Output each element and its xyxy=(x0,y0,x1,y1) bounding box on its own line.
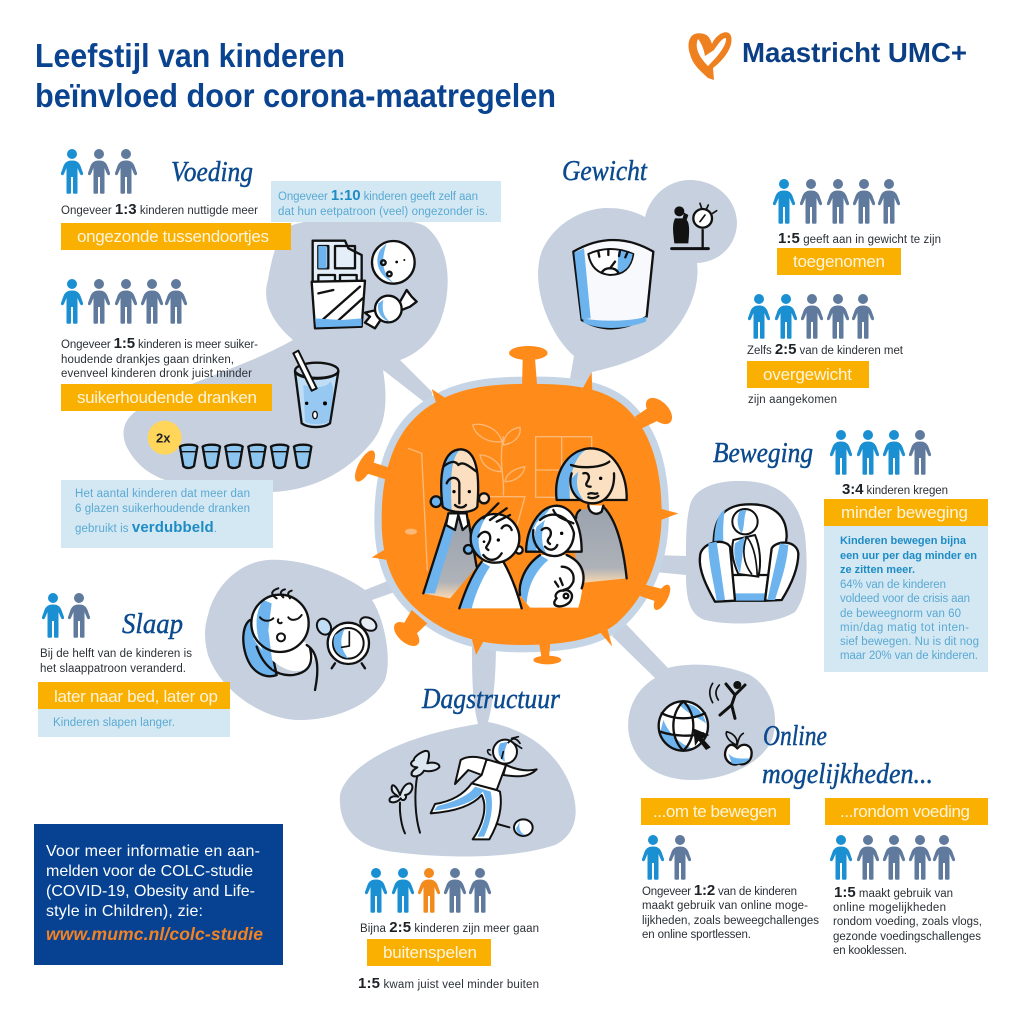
icon: sleeping child xyxy=(243,588,317,690)
illustration: sleeping child and clock xyxy=(243,588,379,690)
panel: later naar bed: later naar bed, later op xyxy=(54,687,218,706)
text: online voeding: online mogelijkheden xyxy=(833,902,946,914)
label bar: rondom voeding xyxy=(825,798,988,825)
text: suikerhoudende drankjes: evenveel kinderen dronk juist minder xyxy=(61,368,252,380)
pictogram: slaap 1 of 2 xyxy=(42,593,90,638)
pictogram: online 1 of 2 xyxy=(642,835,691,880)
pictogram: 1 of 5 children xyxy=(61,279,187,324)
icon: bathroom scale xyxy=(573,240,653,328)
virus body xyxy=(382,384,662,645)
icon: person on scale xyxy=(672,203,717,249)
pictogram: gewicht 2 of 5 xyxy=(748,294,874,339)
illustration: corona virus with family xyxy=(351,346,678,664)
text: 1:5 minder buiten: 1:5 kwam juist veel minder buiten xyxy=(358,975,539,992)
icon: flowers xyxy=(390,751,439,833)
panel: blob connectors and grey thought bubbles xyxy=(124,180,807,856)
text: 3:4: 3:4 kinderen kregen xyxy=(842,481,948,498)
heading: Gewicht: Gewicht xyxy=(562,155,648,187)
pictogram: 1 of 3 children xyxy=(61,149,137,194)
callout: verdubbeld: gebruikt is verdubbeld. xyxy=(75,519,217,536)
icon: globe with cursor xyxy=(659,701,711,751)
info box: meer informatie: style in Children), zie: xyxy=(46,903,203,920)
info box: meer informatie: Voor meer informatie en aan- xyxy=(46,843,260,860)
label bar: ongezonde tussendoortjes xyxy=(61,223,291,250)
title: beïnvloed door corona-maatregelen xyxy=(35,77,556,114)
label bar: rondom voeding: ...rondom voeding xyxy=(840,802,970,821)
icon: child xyxy=(431,737,537,839)
daughter xyxy=(520,506,584,608)
info box: meer informatie: (COVID-19, Obesity and Life- xyxy=(46,883,255,900)
heading: Slaap: Slaap xyxy=(122,608,183,640)
heading: Voeding: Voeding xyxy=(171,156,253,188)
panel: minder beweging: ze zitten meer. xyxy=(840,564,915,576)
blob: beweging xyxy=(655,481,807,624)
text: zijn aangekomen: zijn aangekomen xyxy=(748,394,837,406)
icon: ball xyxy=(514,819,533,836)
panel: minder beweging: Kinderen bewegen bijna xyxy=(840,535,967,547)
label bar: suikerhoudende dranken xyxy=(61,384,272,411)
logo: Maastricht UMC+: Maastricht UMC+ xyxy=(742,37,967,68)
text: online bewegen: Ongeveer 1:2 van de kinderen xyxy=(642,882,797,899)
label bar: suikerhoudende dranken: suikerhoudende dranken xyxy=(77,388,257,407)
text: online voeding: en kooklessen. xyxy=(833,945,907,957)
icon: chocolate bar xyxy=(312,241,365,328)
pictogram: online 1 of 5 xyxy=(830,835,955,880)
info box: meer informatie: www.mumc.nl/colc-studie xyxy=(46,924,263,944)
icon: candy xyxy=(365,290,417,328)
label bar: toegenomen: toegenomen xyxy=(793,252,885,271)
text: online bewegen: lijkheden, zoals beweegchallenges xyxy=(642,915,819,927)
label bar: toegenomen xyxy=(777,248,901,275)
blob: voeding xyxy=(124,217,448,493)
info box: meer informatie xyxy=(34,824,283,965)
panel: minder beweging: sief bewegen. Nu is dit nog xyxy=(840,636,979,648)
icon: 2x badge: 2x xyxy=(156,430,171,445)
heading: Beweging: Beweging xyxy=(713,437,813,469)
panel: minder beweging: een uur per dag minder en xyxy=(840,550,977,562)
text: online voeding xyxy=(833,884,982,957)
panel: later naar bed xyxy=(38,682,230,737)
panel: later naar bed: Kinderen slapen langer. xyxy=(53,717,175,729)
text: suikerhoudende drankjes: houdende drankjes gaan drinken, xyxy=(61,354,234,366)
callout: 1:10: Ongeveer 1:10 kinderen geeft zelf aan xyxy=(278,187,478,204)
illustration: online icons xyxy=(659,681,752,765)
label bar: om te bewegen xyxy=(641,798,790,825)
text: online voeding: gezonde voedingschallenges xyxy=(833,931,981,943)
label bar: om te bewegen: ...om te bewegen xyxy=(653,802,777,821)
blob: dagstructuur xyxy=(340,640,576,856)
text: online bewegen: maakt gebruik van online moge- xyxy=(642,900,808,912)
label bar: buitenspelen xyxy=(367,939,491,966)
text: bijna 2:5: Bijna 2:5 kinderen zijn meer gaan xyxy=(360,919,539,936)
mother xyxy=(556,448,627,583)
title: Leefstijl van kinderen xyxy=(35,37,345,74)
pictogram: dagstructuur 2 of 5 plus 1 orange xyxy=(365,868,491,913)
text: zelfs 2:5: Zelfs 2:5 van de kinderen met xyxy=(747,341,904,358)
illustration: child in armchair xyxy=(700,504,798,602)
info box: meer informatie: melden voor de COLC-studie xyxy=(46,863,253,880)
illustration: snacks xyxy=(148,241,417,468)
text: helft kinderen: het slaappatroon veranderd. xyxy=(40,663,186,675)
panel: minder beweging: de beweegnorm van 60 xyxy=(840,608,961,620)
panel: minder beweging: maar 20% van de kinderen. xyxy=(840,650,978,662)
pictogram: beweging 3 of 4 xyxy=(830,430,931,475)
illustration: weighing scales xyxy=(573,203,717,328)
father xyxy=(423,449,489,598)
icon: apple xyxy=(725,732,752,765)
icon: six glasses xyxy=(180,445,311,468)
text: 1:5 gewicht: 1:5 geeft aan in gewicht te zijn xyxy=(778,230,941,247)
heading: Online mogelijkheden xyxy=(762,720,933,790)
text: ongeveer 1:3: Ongeveer 1:3 kinderen nuttigde meer xyxy=(61,201,258,218)
icon: glass with straw xyxy=(293,351,338,427)
title xyxy=(35,37,556,114)
son xyxy=(459,503,523,608)
panel: minder beweging: 64% van de kinderen xyxy=(840,579,946,591)
text: helft kinderen: Bij de helft van de kinderen is xyxy=(40,648,192,660)
icon: 2x badge xyxy=(148,421,182,455)
text: online voeding: 1:5 maakt gebruik van xyxy=(834,884,953,901)
text: online bewegen: en online sportlessen. xyxy=(642,929,751,941)
panel: minder beweging xyxy=(824,499,988,672)
panel: minder beweging: minder beweging xyxy=(841,503,968,522)
background: door, plant, window xyxy=(405,424,592,570)
callout: 1:10: dat hun eetpatroon (veel) ongezonder is. xyxy=(278,206,488,218)
label bar: ongezonde tussendoortjes: ongezonde tussendoortjes xyxy=(77,227,269,246)
panel: minder beweging: voldeed voor de crisis aan xyxy=(840,593,970,605)
virus ring xyxy=(382,384,662,645)
text: online voeding: rondom voeding, zoals vlogs, xyxy=(833,916,982,928)
callout: verdubbeld xyxy=(61,480,273,548)
label bar: buitenspelen: buitenspelen xyxy=(383,943,477,962)
blob: online xyxy=(612,622,775,780)
text: helft kinderen xyxy=(40,648,192,675)
pictogram: gewicht 1 of 5 xyxy=(773,179,900,224)
blob: gewicht xyxy=(538,180,737,392)
blob: slaap xyxy=(205,560,406,720)
heading: Online mogelijkheden: mogelijkheden... xyxy=(762,758,933,790)
label bar: overgewicht: overgewicht xyxy=(763,365,852,384)
callout: 1:10 xyxy=(271,181,501,222)
callout: verdubbeld: Het aantal kinderen dat meer dan xyxy=(75,488,250,500)
text: suikerhoudende drankjes: Ongeveer 1:5 kinderen is meer suiker- xyxy=(61,335,258,352)
icon: jumping figure xyxy=(710,681,745,718)
text: suikerhoudende drankjes xyxy=(61,335,258,380)
text: online bewegen xyxy=(642,882,819,941)
panel: minder beweging: min/dag matig tot inten- xyxy=(840,622,969,634)
heading: Dagstructuur: Dagstructuur xyxy=(421,683,561,715)
label bar: overgewicht xyxy=(747,361,869,388)
logo: Maastricht UMC+ xyxy=(689,32,967,80)
icon: cookie xyxy=(372,241,415,284)
virus spikes xyxy=(351,346,678,664)
illustration: child playing football xyxy=(390,737,537,839)
heading: Online mogelijkheden: Online xyxy=(763,720,827,752)
icon: alarm clock xyxy=(314,614,379,668)
callout: verdubbeld: 6 glazen suikerhoudende dranken xyxy=(75,503,250,515)
